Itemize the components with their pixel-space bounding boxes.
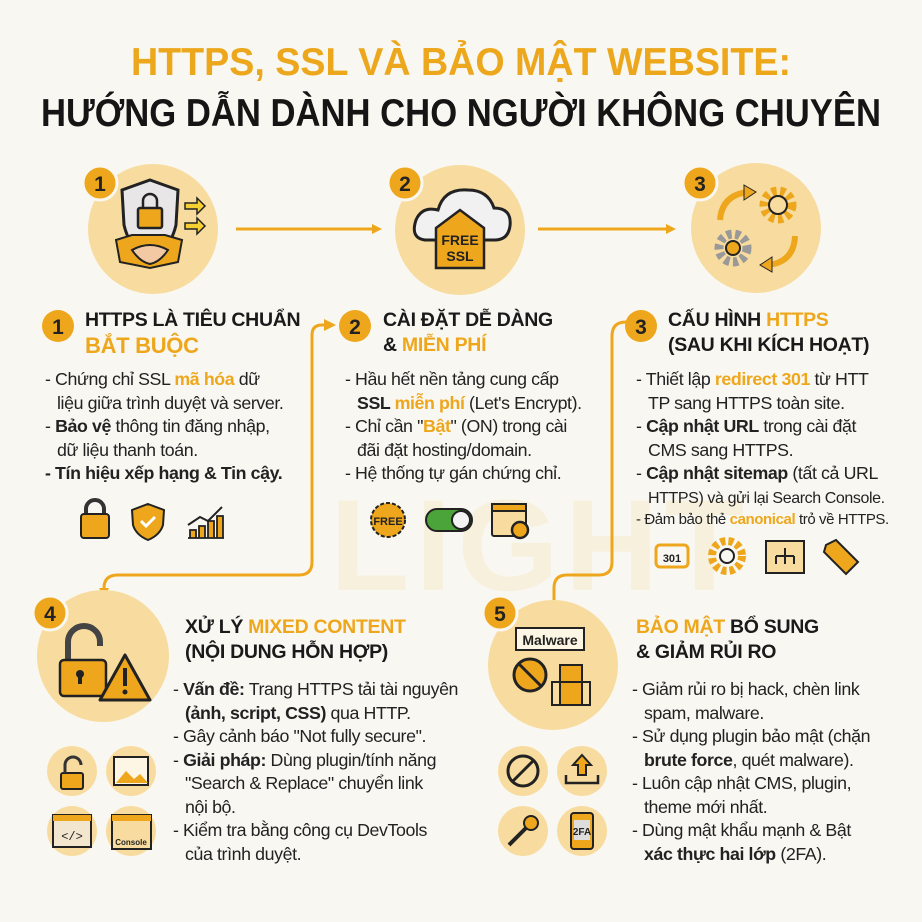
icon circle 2: free ssl cloud: SSL: [446, 248, 474, 264]
icon circle 1: shield handshake: 1: [94, 173, 106, 196]
icon circle 1: shield handshake: [83, 164, 218, 294]
icons grid: section 4: Console: [115, 838, 147, 847]
bullets 1: [45, 369, 283, 483]
bullets 1: dữ liệu thanh toán.: [57, 440, 198, 460]
bullets 5: spam, malware.: [644, 702, 764, 722]
heading 4: [185, 616, 406, 663]
icon circle 2: free ssl cloud: FREE: [441, 232, 479, 248]
bullets 4: - Gây cảnh báo "Not fully secure".: [173, 726, 426, 746]
bullets 1: - Tín hiệu xếp hạng & Tin cậy.: [45, 463, 282, 483]
bullets 3: TP sang HTTPS toàn site.: [648, 392, 845, 412]
icons row: section 3: [656, 540, 858, 574]
icon circle 5: malware building: 5: [494, 603, 506, 626]
bullets 3: [636, 369, 889, 528]
heading 1: HTTPS LÀ TIÊU CHUẨN: [85, 309, 300, 331]
bullets 5: - Dùng mật khẩu mạnh & Bật: [632, 820, 851, 840]
heading 5: [636, 616, 819, 663]
icons grid: section 5: [498, 746, 607, 856]
bullets 5: brute force, quét malware).: [644, 750, 854, 770]
icons grid: section 5: 2FA: [573, 827, 591, 838]
heading 4: XỬ LÝ MIXED CONTENT: [185, 616, 406, 638]
bullets 4: nội bộ.: [185, 796, 236, 816]
bullets 4: - Kiểm tra bằng công cụ DevTools: [173, 820, 427, 840]
arrow: connector to 4: [104, 319, 336, 594]
bullets 5: - Luôn cập nhật CMS, plugin,: [632, 773, 851, 793]
heading 3: CẤU HÌNH HTTPS: [668, 309, 828, 331]
title: HTTPS, SSL VÀ BẢO MẬT WEBSITE:: [131, 40, 791, 84]
bullets 2: đãi đặt hosting/domain.: [357, 440, 532, 460]
badges beside headings: [42, 310, 657, 342]
icon circle 4: open lock warning: 4: [44, 603, 56, 626]
bullets 5: theme mới nhất.: [644, 796, 767, 816]
heading 1: [85, 308, 300, 358]
icon circle 3: gears: [683, 163, 821, 293]
icon circle 3: gears: 3: [694, 173, 706, 196]
bullets 4: "Search & Replace" chuyển link: [185, 773, 423, 793]
bullets 3: - Thiết lập redirect 301 từ HTT: [636, 369, 868, 389]
bullets 1: - Chứng chỉ SSL mã hóa dữ: [45, 369, 260, 389]
icons row: section 1: [81, 500, 224, 540]
bullets 4: của trình duyệt.: [185, 844, 301, 864]
bullets 3: - Đảm bảo thẻ canonical trỏ về HTTPS.: [636, 511, 889, 528]
arrow: 2 to 3: [538, 228, 672, 230]
bullets 1: - Bảo vệ thông tin đăng nhập,: [45, 416, 270, 436]
bullets 2: [345, 369, 582, 483]
bullets 4: [173, 679, 458, 864]
icon circle 2: free ssl cloud: [388, 165, 525, 295]
heading 2: [383, 308, 553, 356]
bullets 5: - Giảm rủi ro bị hack, chèn link: [632, 679, 859, 699]
title: [41, 40, 881, 135]
badges beside headings: 2: [349, 316, 361, 339]
arrow: connector 3 to 5: [554, 322, 626, 600]
bullets 2: SSL miễn phí (Let's Encrypt).: [357, 392, 582, 412]
bullets 2: - Hệ thống tự gán chứng chỉ.: [345, 463, 561, 483]
icons row: section 3: 301: [663, 553, 681, 565]
heading 1: BẮT BUỘC: [85, 333, 199, 358]
bullets 2: - Hầu hết nền tảng cung cấp: [345, 369, 559, 389]
badges beside headings: 3: [635, 316, 647, 339]
heading 3: [668, 308, 869, 356]
watermark: LIGHT: [330, 472, 750, 618]
bullets 4: - Giải pháp: Dùng plugin/tính năng: [173, 750, 436, 770]
badges beside headings: 1: [52, 316, 64, 339]
bullets 5: - Sử dụng plugin bảo mật (chặn: [632, 726, 870, 746]
arrow: 1 to 2: [236, 228, 378, 230]
icon circle 5: malware building: [483, 596, 618, 730]
bullets 4: (ảnh, script, CSS) qua HTTP.: [185, 702, 411, 722]
bullets 5: xác thực hai lớp (2FA).: [644, 844, 826, 864]
bullets 3: - Cập nhật URL trong cài đặt: [636, 416, 856, 436]
heading 5: & GIẢM RỦI RO: [636, 641, 776, 663]
icons grid: section 4: </>: [61, 830, 83, 844]
icon circle 4: open lock warning: [33, 590, 169, 722]
heading 4: (NỘI DUNG HỖN HỢP): [185, 641, 388, 663]
bullets 3: - Cập nhật sitemap (tất cả URL: [636, 463, 878, 483]
heading 2: & MIỄN PHÍ: [383, 334, 486, 356]
heading 2: CÀI ĐẶT DỄ DÀNG: [383, 309, 553, 331]
heading 5: BẢO MẬT BỔ SUNG: [636, 616, 819, 638]
bullets 2: - Chỉ cần "Bật" (ON) trong cài: [345, 416, 567, 436]
icons grid: section 4: [47, 746, 156, 856]
bullets 5: [632, 679, 870, 864]
icon circle 5: malware building: Malware: [522, 632, 578, 648]
icons row: section 2: FREE: [373, 516, 403, 528]
bullets 3: HTTPS) và gửi lại Search Console.: [648, 490, 885, 506]
icons row: section 2: [371, 503, 528, 538]
heading 3: (SAU KHI KÍCH HOẠT): [668, 334, 869, 356]
bullets 4: - Vấn đề: Trang HTTPS tải tài nguyên: [173, 679, 458, 699]
icon circle 2: free ssl cloud: 2: [399, 173, 411, 196]
bullets 3: CMS sang HTTPS.: [648, 440, 793, 460]
bullets 1: liệu giữa trình duyệt và server.: [57, 392, 283, 412]
